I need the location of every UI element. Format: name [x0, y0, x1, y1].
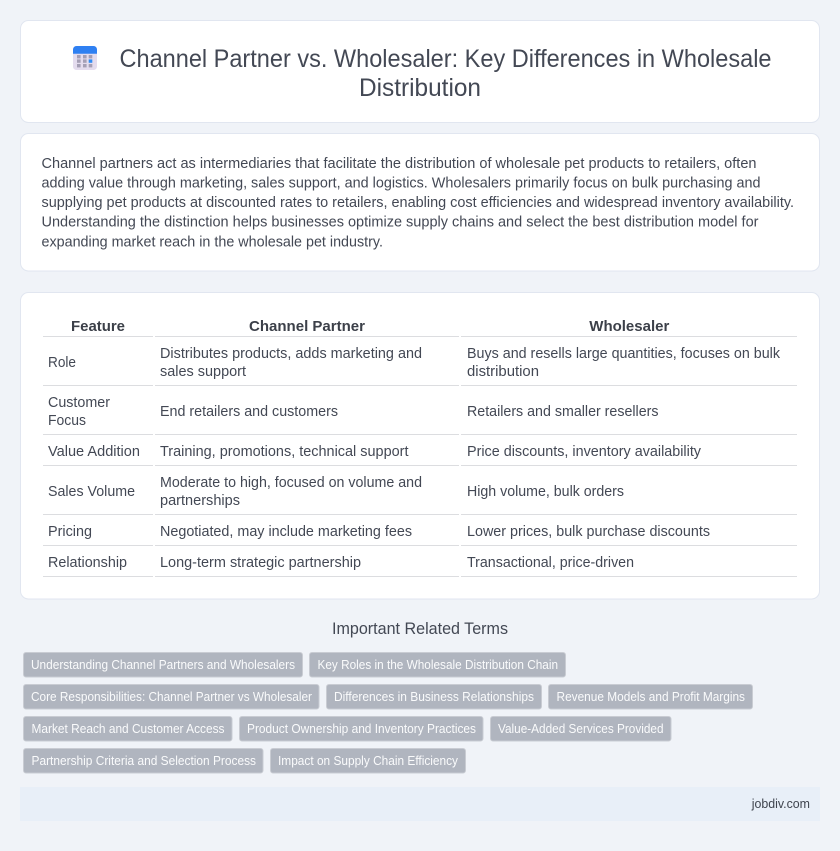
row: customer focus: Focus	[48, 412, 86, 429]
panel: description	[20, 134, 820, 271]
description text: supplying pet products at discounted rates to retailers, enabling cost efficiencies and widespread inventory availability.	[42, 194, 794, 211]
row: customer focus	[48, 394, 658, 429]
icon: calendar	[73, 46, 97, 70]
tag	[24, 652, 302, 677]
tag: Understanding Channel Partners and Wholesalers	[31, 657, 295, 672]
tag: Product Ownership and Inventory Practices	[247, 721, 476, 736]
tag list	[24, 652, 752, 773]
row: role: Buys and resells large quantities, focuses on bulk	[467, 345, 780, 362]
row: relationship: Transactional, price-driven	[467, 554, 634, 571]
tag: Market Reach and Customer Access	[32, 721, 225, 736]
row: role: sales support	[160, 363, 247, 380]
tag	[24, 748, 263, 773]
row: customer focus: End retailers and customers	[160, 403, 338, 420]
row: value addition: Training, promotions, technical support	[160, 443, 409, 460]
table header row: Channel Partner	[249, 318, 365, 335]
row: customer focus: Retailers and smaller resellers	[467, 403, 658, 420]
tag	[270, 748, 466, 773]
table header row: Wholesaler	[589, 318, 669, 335]
tag	[548, 684, 752, 709]
row: value addition: Value Addition	[48, 443, 140, 460]
row: sales volume	[48, 474, 624, 509]
row: relationship: Long-term strategic partnership	[160, 554, 361, 571]
description text: adding value through marketing, sales support, and logistics. Wholesalers primarily focus on bulk purchasing and	[42, 174, 760, 192]
row: sales volume: High volume, bulk orders	[467, 483, 624, 500]
tag: Impact on Supply Chain Efficiency	[278, 753, 458, 768]
row: pricing	[48, 523, 710, 540]
row: value addition	[48, 443, 701, 460]
row: sales volume: Sales Volume	[48, 483, 135, 500]
row: role: distribution	[467, 363, 539, 380]
tag: Value-Added Services Provided	[498, 721, 664, 736]
row: pricing: Negotiated, may include marketing fees	[160, 523, 412, 540]
footer source label: jobdiv.com	[751, 796, 810, 811]
title: Channel Partner vs. Wholesaler: Key Differences in Wholesale	[120, 45, 772, 73]
row: customer focus: Customer	[48, 394, 110, 411]
row: pricing: Lower prices, bulk purchase discounts	[467, 523, 710, 540]
row: sales volume: Moderate to high, focused on volume and	[160, 474, 422, 491]
row: pricing: Pricing	[48, 523, 92, 540]
tag	[24, 716, 232, 741]
table header row: Feature	[71, 318, 125, 335]
row: sales volume: partnerships	[160, 492, 240, 509]
tag	[240, 716, 483, 741]
row: role	[48, 345, 780, 380]
tag	[490, 716, 671, 741]
row: relationship: Relationship	[48, 554, 127, 571]
description text	[42, 155, 794, 250]
tag	[326, 684, 542, 709]
panel: comparison table	[20, 292, 820, 599]
tag: Revenue Models and Profit Margins	[556, 689, 745, 704]
description text: expanding market reach in the wholesale pet industry.	[42, 234, 383, 250]
tag	[310, 652, 566, 677]
tag: Core Responsibilities: Channel Partner vs Wholesaler	[31, 689, 313, 704]
panel: header	[20, 20, 820, 122]
tag: Differences in Business Relationships	[334, 689, 534, 704]
footer	[20, 787, 820, 821]
heading: important related terms: Important Related Terms	[332, 620, 508, 638]
table header row	[71, 318, 669, 335]
tag	[24, 684, 319, 709]
description text: Understanding the distinction helps businesses optimize supply chains and select the best distribution model for	[42, 214, 758, 230]
row: relationship	[48, 554, 634, 571]
title	[120, 45, 772, 102]
tag: Key Roles in the Wholesale Distribution Chain	[318, 657, 558, 672]
tag: Partnership Criteria and Selection Process	[32, 753, 256, 768]
row: value addition: Price discounts, inventory availability	[467, 443, 701, 460]
title: Distribution	[359, 74, 481, 102]
row: role: Distributes products, adds marketing and	[160, 345, 422, 362]
description text: Channel partners act as intermediaries that facilitate the distribution of wholesale pet products to retailers, often	[42, 155, 756, 172]
row: role: Role	[48, 354, 76, 371]
